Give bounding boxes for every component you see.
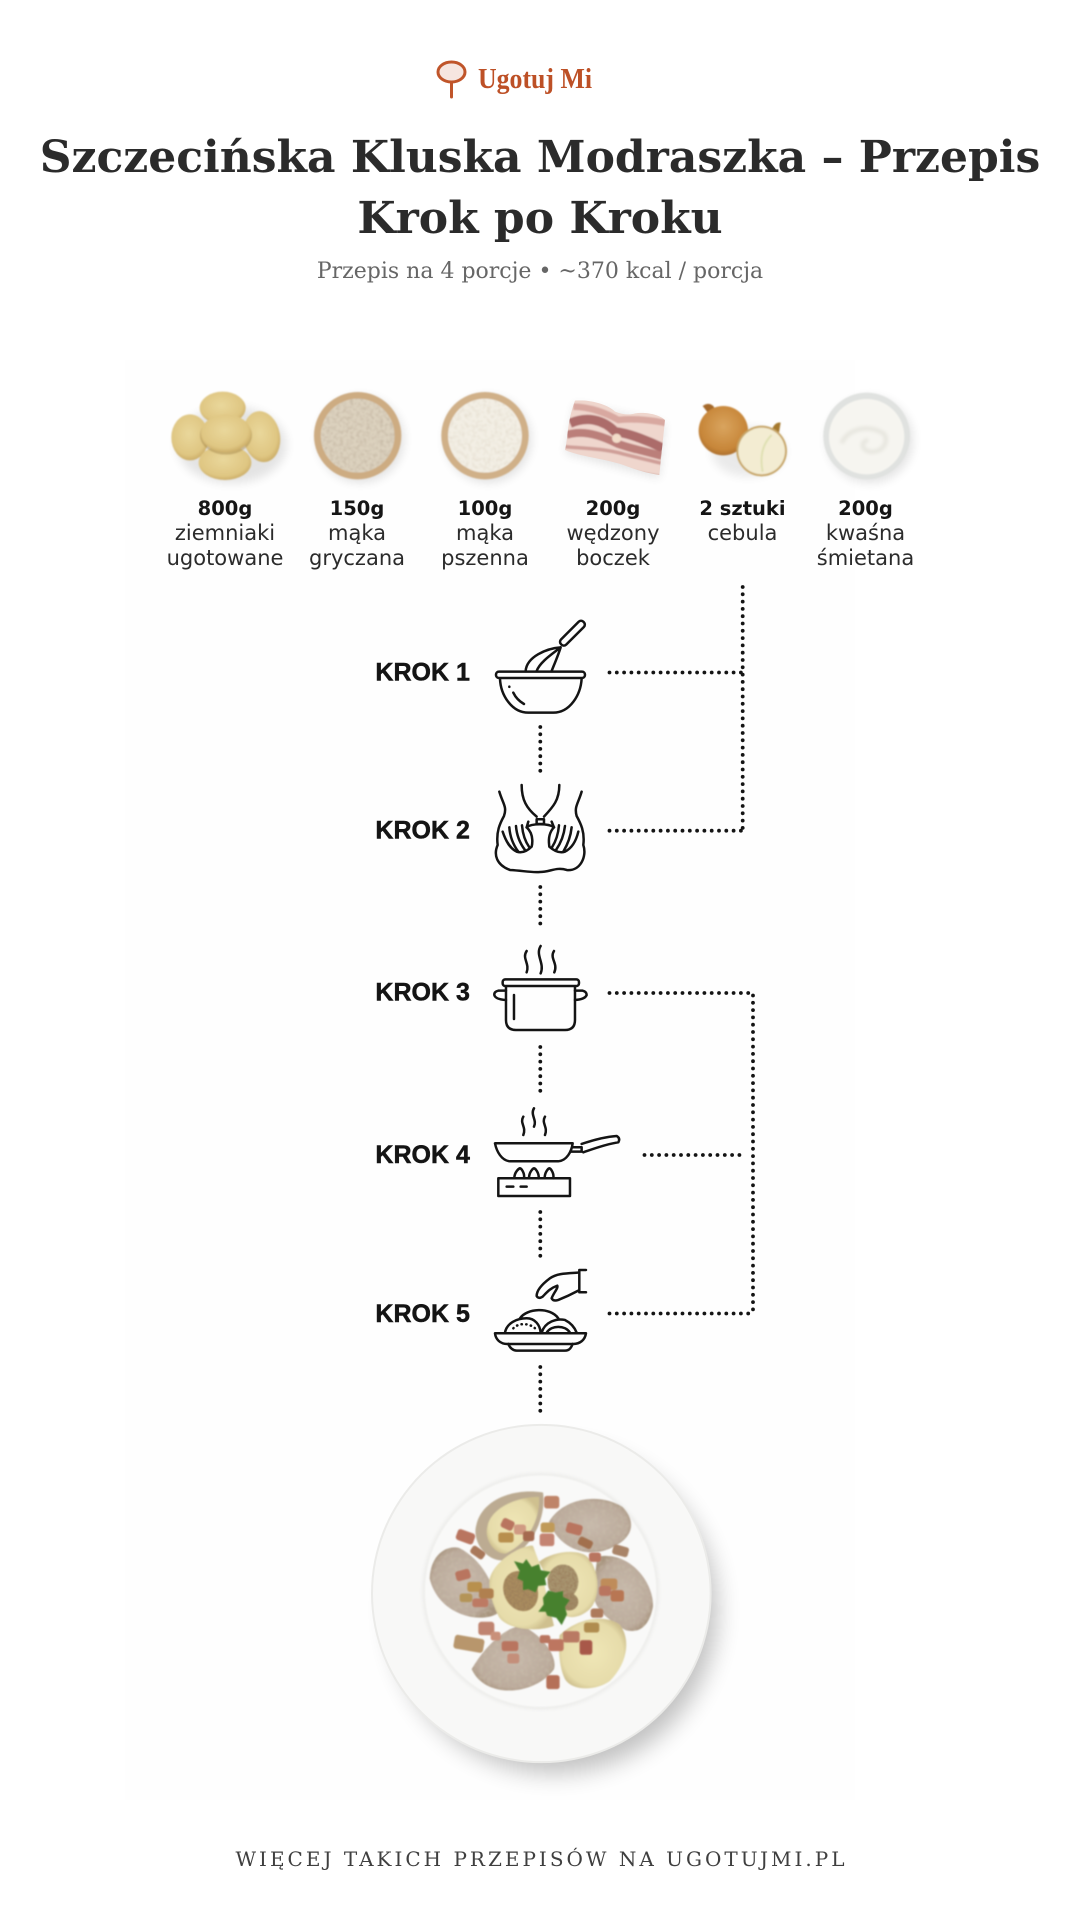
connector lines (540, 587, 753, 1411)
label: wheat flour: mąka (456, 521, 514, 545)
ingredient: buckwheat flour (314, 392, 404, 483)
icon: frying pan on burner (495, 1108, 619, 1196)
label: potatoes: 800g (198, 497, 252, 520)
dumplings (430, 1492, 653, 1691)
label: buckwheat flour: gryczana (309, 546, 405, 570)
label: sour cream: 200g (838, 497, 893, 520)
parsley garnish (514, 1559, 570, 1625)
ingredient: smoked bacon (564, 400, 666, 478)
label: sour cream: kwaśna (826, 521, 905, 545)
label: bacon: boczek (576, 546, 651, 570)
label: buckwheat flour: mąka (328, 521, 386, 545)
label: sour cream: śmietana (817, 546, 914, 570)
buckwheat filling (497, 1564, 578, 1617)
logo (438, 62, 592, 97)
step 4 (375, 1108, 619, 1196)
background of illustration (125, 360, 855, 1800)
step 5 label: KROK 5 (375, 1300, 470, 1328)
label: wheat flour: pszenna (441, 546, 529, 570)
step 3 label: KROK 3 (375, 978, 470, 1006)
ingredient labels (167, 497, 914, 570)
icon: hand serving dumplings (495, 1270, 586, 1351)
label: potatoes: ziemniaki (175, 521, 275, 545)
plate (371, 1424, 712, 1763)
label: wheat flour: 100g (458, 497, 512, 520)
title: Szczecińska Kluska Modraszka – Przepis (40, 132, 1040, 183)
step 1 label: KROK 1 (375, 658, 470, 686)
icon: kneading hands (496, 785, 584, 872)
step 1 (375, 619, 586, 713)
finished dish: plate of dumplings (371, 1424, 717, 1773)
label: buckwheat flour: 150g (330, 497, 384, 520)
logo icon: spoon (438, 62, 465, 97)
bacon bits (453, 1496, 630, 1689)
icon: boiling pot (494, 946, 587, 1030)
ingredient: wheat flour (441, 392, 531, 483)
step 3 (375, 946, 587, 1030)
label: onion: cebula (708, 521, 777, 545)
step 5 (375, 1270, 586, 1351)
label: bacon: wędzony (566, 521, 660, 545)
step 2 label: KROK 2 (375, 816, 470, 844)
icon: whisk and bowl (496, 619, 586, 713)
logo wordmark: Ugotuj Mi (478, 63, 592, 95)
panel: ingredients (167, 392, 914, 570)
ingredient: potatoes (171, 392, 287, 483)
ingredient: sour cream (823, 393, 913, 483)
footer: WIĘCEJ TAKICH PRZEPISÓW NA UGOTUJMI.PL (235, 1846, 848, 1871)
label: potatoes: ugotowane (167, 546, 283, 570)
plate shadow (391, 1447, 717, 1773)
step 2 (375, 785, 584, 872)
step 4 label: KROK 4 (375, 1141, 470, 1169)
label: onion: 2 sztuki (699, 497, 786, 520)
title: Krok po Kroku (357, 193, 723, 244)
label: bacon: 200g (586, 497, 640, 520)
subtitle: Przepis na 4 porcje • ~370 kcal / porcja (317, 259, 763, 284)
ingredient: onions (699, 404, 787, 477)
